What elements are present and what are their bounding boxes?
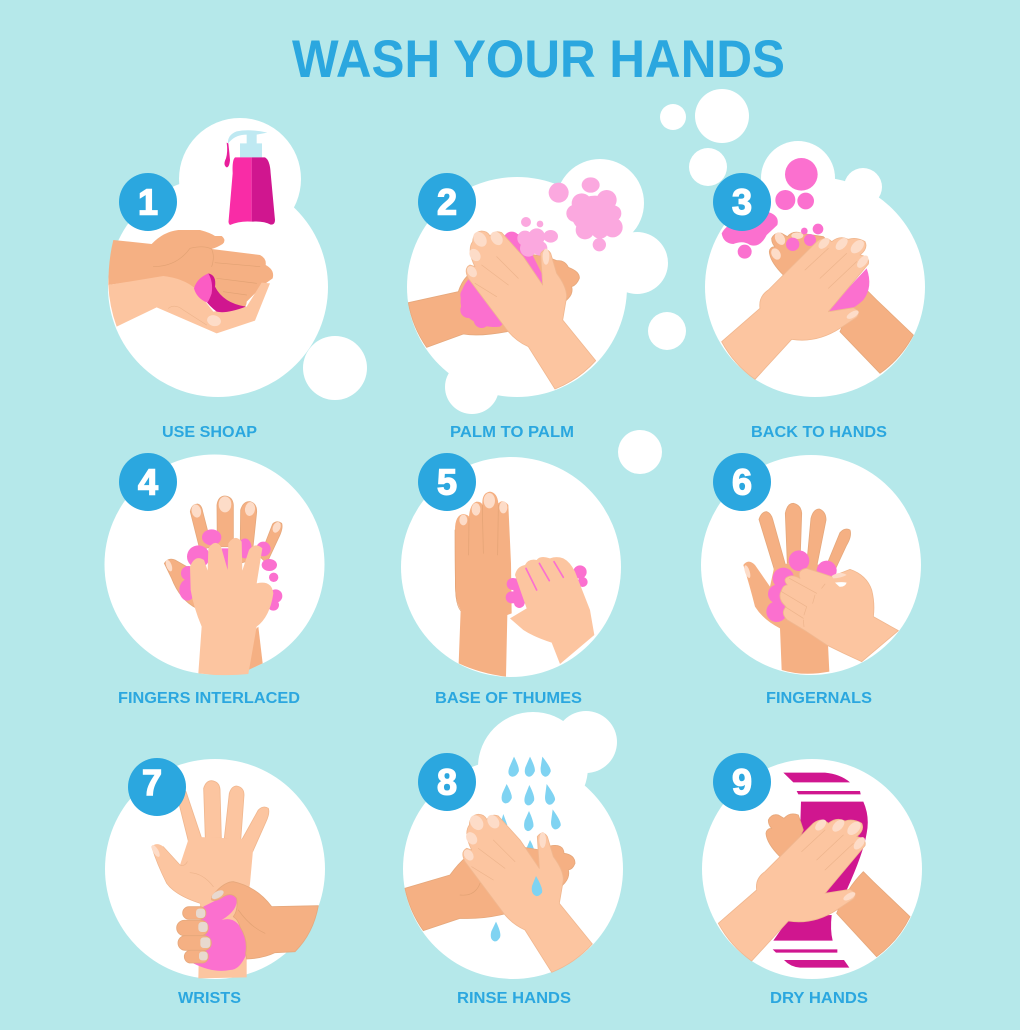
badge 1: 1 bbox=[138, 182, 158, 222]
white circle panel 4 bbox=[104, 454, 324, 674]
illustration: soap bottle and cupped hands bbox=[108, 130, 275, 333]
badge 3: 3 bbox=[732, 182, 752, 222]
badge 6: 6 bbox=[732, 462, 752, 502]
open palm hand bbox=[743, 503, 851, 674]
panel 8: rinse hands bbox=[403, 711, 623, 1007]
illustration: interlaced fingers bbox=[164, 496, 282, 675]
front hand bbox=[190, 538, 273, 675]
panel 5: base of thumbs bbox=[401, 453, 621, 707]
illustration: drying hands with a towel bbox=[718, 773, 910, 968]
front hand bbox=[465, 229, 596, 389]
upright hand bbox=[455, 492, 512, 677]
back hand bbox=[108, 230, 273, 310]
white circle panel 6 bbox=[701, 455, 921, 675]
badge 1 bbox=[119, 173, 177, 231]
badge 9 bbox=[713, 753, 771, 811]
soap foam bbox=[179, 529, 282, 611]
panel 4: fingers interlaced bbox=[104, 453, 324, 707]
panel 7: wrists bbox=[105, 758, 325, 1007]
badge 8: 8 bbox=[437, 762, 457, 802]
badge 6 bbox=[713, 453, 771, 511]
panel 1: use soap bbox=[108, 118, 367, 441]
water drops bbox=[491, 757, 561, 941]
label 5: BASE OF THUMES bbox=[435, 690, 582, 707]
soap foam bbox=[460, 232, 547, 328]
title: WASH YOUR HANDS bbox=[292, 30, 785, 89]
back hand bbox=[769, 231, 913, 373]
soap foam bbox=[766, 550, 837, 622]
white circle panel 7 bbox=[105, 759, 325, 979]
label 6: FINGERNALS bbox=[766, 690, 872, 707]
illustration: gripping the wrist bbox=[150, 781, 318, 978]
label 2: PALM TO PALM bbox=[450, 424, 574, 441]
badge 2: 2 bbox=[437, 182, 457, 222]
label 1: USE SHOAP bbox=[162, 424, 257, 441]
white bubbles panel 2 bbox=[407, 159, 686, 474]
soap foam bbox=[193, 895, 247, 971]
panel 9: dry hands bbox=[702, 753, 922, 1007]
badge 9: 9 bbox=[732, 762, 752, 802]
wrist behind bbox=[248, 627, 263, 670]
foam circles bbox=[722, 158, 818, 259]
white circle panel 9 bbox=[702, 759, 922, 979]
gripping hand bbox=[177, 882, 318, 963]
badge 4: 4 bbox=[138, 462, 158, 502]
light foam on hand bbox=[517, 228, 547, 257]
badge 3 bbox=[713, 173, 771, 231]
towel overlap bbox=[821, 862, 854, 898]
back hand fingers bbox=[164, 496, 282, 608]
gripping hand bbox=[510, 557, 594, 664]
back hand bbox=[766, 814, 910, 957]
panel 2: palm to palm bbox=[407, 159, 686, 474]
soap in palm bbox=[194, 273, 246, 312]
back hand bbox=[408, 250, 579, 347]
badge 5: 5 bbox=[437, 462, 457, 502]
white circle panel 5 bbox=[401, 457, 621, 677]
badge 2 bbox=[418, 173, 476, 231]
illustration: back of hands with foam bbox=[722, 158, 913, 379]
illustration: scrubbing fingernails in palm bbox=[743, 503, 898, 674]
front hand bbox=[722, 236, 870, 379]
badge 7: 7 bbox=[142, 762, 162, 803]
foam bubbles bbox=[521, 177, 623, 251]
label 9: DRY HANDS bbox=[770, 990, 868, 1007]
back hand bbox=[405, 843, 575, 931]
panel 6: fingernails bbox=[701, 453, 921, 707]
panel 3: back to hands bbox=[660, 89, 925, 441]
badge 7 bbox=[128, 758, 186, 816]
illustration: rubbing palms with foam bbox=[408, 177, 623, 389]
white bubbles panel 1 bbox=[108, 118, 367, 400]
label 8: RINSE HANDS bbox=[457, 990, 571, 1007]
badge 8 bbox=[418, 753, 476, 811]
white bubbles panel 8 bbox=[403, 711, 623, 979]
badge 5 bbox=[418, 453, 476, 511]
illustration: rinsing hands under water drops bbox=[405, 757, 592, 972]
illustration: rubbing base of thumb bbox=[455, 492, 594, 677]
badge 4 bbox=[119, 453, 177, 511]
towel bbox=[773, 773, 868, 968]
raised hand bbox=[150, 781, 269, 978]
front hand bbox=[108, 276, 270, 333]
label 4: FINGERS INTERLACED bbox=[118, 690, 300, 707]
white bubbles panel 3 bbox=[660, 89, 925, 397]
label 3: BACK TO HANDS bbox=[751, 424, 887, 441]
front hand bbox=[718, 817, 867, 961]
soap bbox=[786, 224, 869, 314]
scrubbing hand bbox=[780, 568, 898, 662]
front hand bbox=[462, 813, 592, 972]
label 7: WRISTS bbox=[178, 990, 241, 1007]
icon: soap pump bottle bbox=[224, 130, 275, 225]
soap foam bbox=[506, 565, 588, 608]
